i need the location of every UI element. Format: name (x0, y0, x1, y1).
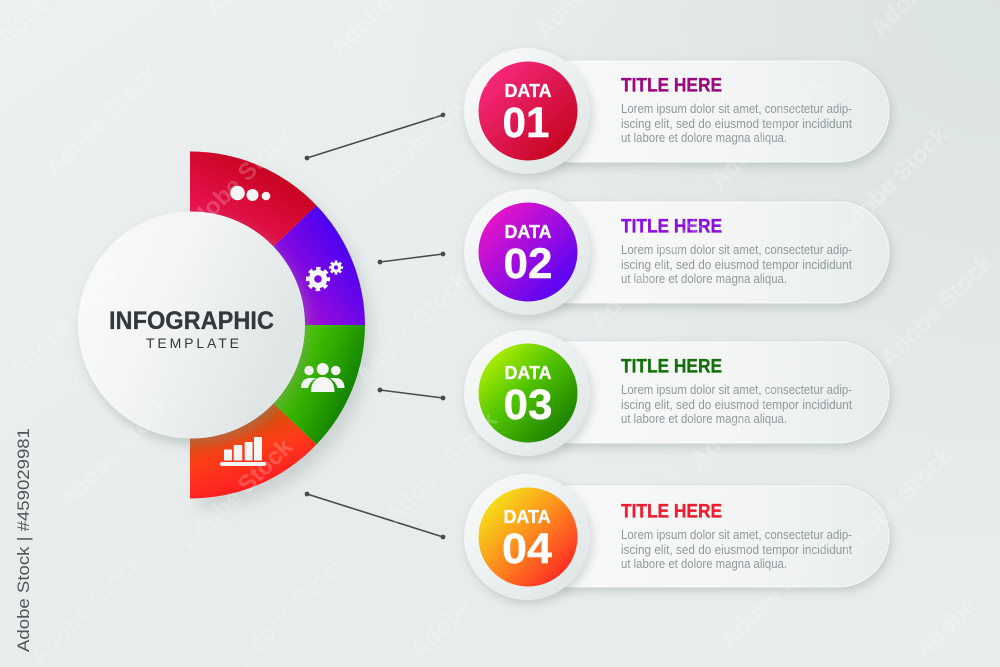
text block 04 (621, 528, 852, 571)
badge 03 (464, 330, 590, 456)
badge 04 (464, 474, 590, 600)
title 04: TITLE HERE (621, 502, 722, 522)
segment: red (190, 151, 316, 247)
title 03: TITLE HERE (621, 356, 722, 378)
pill panel (520, 342, 889, 443)
text block 04: Lorem ipsum dolor sit amet, consectetur adip- (621, 528, 852, 542)
text block 04: ut labore et dolore magna aliqua. (621, 557, 787, 571)
badge 01 (464, 48, 590, 174)
stock watermarks: Adobe Stock (53, 391, 176, 514)
card 02 (464, 189, 889, 315)
card 04 (464, 474, 889, 600)
stock watermarks: Adobe Stock (370, 69, 493, 192)
stock watermarks: Adobe (405, 592, 477, 664)
stock watermarks: Adobe (910, 592, 982, 664)
badge 02: DATA (504, 221, 552, 242)
text block 01: Lorem ipsum dolor sit amet, consectetur adip- (621, 102, 852, 116)
connector line 2 (378, 252, 445, 264)
text block 04: iscing elit, sed do eiusmod tempor incididunt (621, 543, 852, 557)
text block 03: ut labore et dolore magna aliqua. (621, 412, 787, 426)
connector line 1 (305, 113, 445, 160)
badge 04: 04 (502, 525, 552, 573)
text block 02: ut labore et dolore magna aliqua. (621, 272, 787, 286)
title 01: TITLE HERE (621, 76, 722, 96)
text block 03 (621, 383, 852, 426)
connector line 4 (305, 492, 445, 539)
text block 02: Lorem ipsum dolor sit amet, consectetur adip- (621, 243, 852, 257)
ring shadow (190, 151, 364, 499)
segment: orange (190, 403, 316, 499)
stock watermarks: Adobe Stock (585, 211, 708, 334)
semicircle segmented ring (190, 151, 365, 499)
pill panel (520, 202, 889, 303)
pill panel (520, 61, 889, 162)
stock watermarks: Adobe Stock (175, 121, 298, 244)
text block 02 (621, 243, 852, 286)
badge 01: DATA (504, 80, 552, 101)
title 02: TITLE HERE (621, 216, 722, 238)
badge 02: 02 (504, 240, 552, 288)
badge 03: DATA (504, 362, 552, 383)
stock watermarks: Adobe Stock (705, 71, 828, 194)
stock watermarks: Adobe Stock (715, 531, 838, 654)
badge 03: 03 (504, 381, 552, 429)
stock watermarks: Adobe Stock (830, 121, 953, 244)
text block 03: iscing elit, sed do eiusmod tempor incididunt (621, 398, 852, 412)
stock watermarks: Adobe Stock (875, 249, 998, 372)
segment: purple (273, 206, 365, 325)
text block 01: ut labore et dolore magna aliqua. (621, 131, 787, 145)
icon: gears (308, 262, 342, 289)
stock watermarks: Adobe Stock (380, 406, 503, 529)
segment: green (273, 325, 365, 444)
heading: INFOGRAPHIC (109, 307, 274, 335)
badge 01: 01 (502, 99, 550, 147)
icon: bar chart (220, 437, 266, 466)
icon: three dots (230, 186, 270, 201)
subheading: TEMPLATE (146, 335, 239, 351)
stock credit: Adobe Stock | #459029981 (14, 428, 33, 652)
icon: people (301, 363, 344, 392)
central disc (78, 212, 305, 438)
connector line 3 (378, 388, 445, 400)
stock watermarks: Adobe Stock (5, 261, 128, 384)
stock watermarks: Adobe Stock (835, 441, 958, 564)
text block 01: iscing elit, sed do eiusmod tempor incididunt (621, 117, 852, 131)
stock watermarks: Adobe Stock (40, 59, 163, 182)
card 01 (464, 48, 889, 174)
stock watermarks: Adobe Stock (685, 351, 808, 474)
badge 04: DATA (504, 506, 550, 527)
stock watermarks: Adobe Stock (175, 433, 298, 556)
text block 01 (621, 102, 852, 145)
card 03 (464, 330, 889, 456)
text block 02: iscing elit, sed do eiusmod tempor incididunt (621, 258, 852, 272)
badge 02 (464, 189, 590, 315)
stock watermarks: Adobe Stock (350, 266, 473, 389)
text block 03: Lorem ipsum dolor sit amet, consectetur adip- (621, 383, 852, 397)
pill panel (520, 486, 889, 587)
